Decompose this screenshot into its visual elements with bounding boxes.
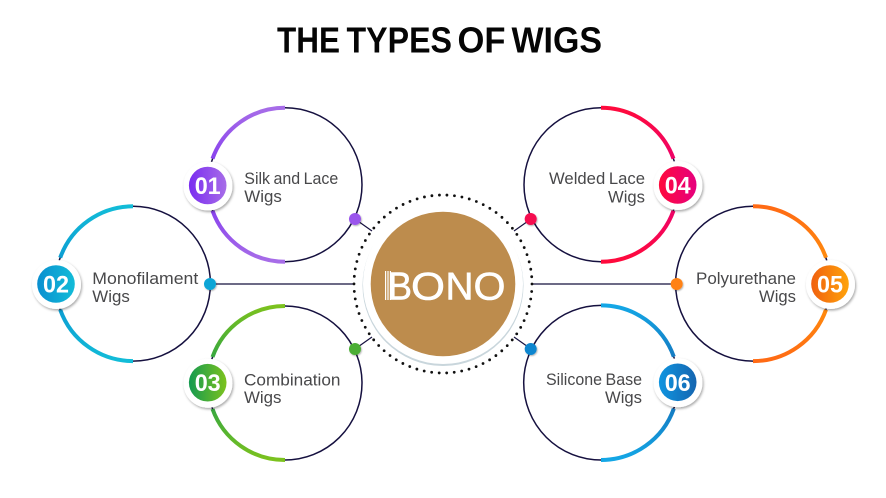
badge 03 [184,359,232,408]
badge 06 [654,358,702,407]
white ring with shadow [362,205,524,366]
title: TYPES [346,20,452,60]
label: Silk and Lace [244,170,338,188]
badge 04: 04 [665,172,691,200]
label: Silicone Base [546,371,642,389]
badge 01: 01 [195,173,221,200]
BONO logo: O [411,266,445,309]
node dot [349,213,361,225]
badge 04 [654,161,702,210]
panel: 01 Silk and Lace Wigs [184,108,362,262]
label: Wigs [244,389,282,407]
connector lines [210,219,677,349]
title: OF [458,20,506,60]
badge 02 [32,260,81,309]
label: Polyurethane [696,270,796,288]
label: Wigs [244,188,282,206]
node dot [671,278,683,290]
label: Wigs [92,288,130,306]
label: Wigs [759,288,796,306]
BONO logo [385,266,506,309]
label: Combination [244,372,340,390]
panel: 04 Welded Lace Wigs [524,108,702,262]
title: WIGS [512,20,602,60]
label: Monofilament [92,270,199,288]
label: Wigs [605,389,642,407]
badge 06: 06 [665,370,691,397]
dotted ring [354,195,532,373]
BONO logo: B [388,266,412,309]
node dot [525,343,537,355]
badge 01 [184,162,232,210]
panel: 03 Combination Wigs [184,306,362,460]
badge 02: 02 [43,272,69,298]
label: Welded Lace [549,170,645,188]
badge 05 [806,260,855,309]
node dot [525,213,537,225]
panel: 05 Polyurethane Wigs [671,206,855,361]
brown disc [371,212,515,356]
node dot [349,343,361,355]
badge 05: 05 [817,272,843,298]
badge 03: 03 [195,370,221,397]
panel: central logo [354,195,532,373]
title: THE [277,20,340,60]
node dot [204,278,216,290]
BONO logo: O [474,266,506,309]
panel: 06 Silicone Base Wigs [524,305,702,460]
BONO logo: N [446,266,474,309]
panel: 02 Monofilament Wigs [32,206,216,361]
label: Wigs [608,188,645,206]
